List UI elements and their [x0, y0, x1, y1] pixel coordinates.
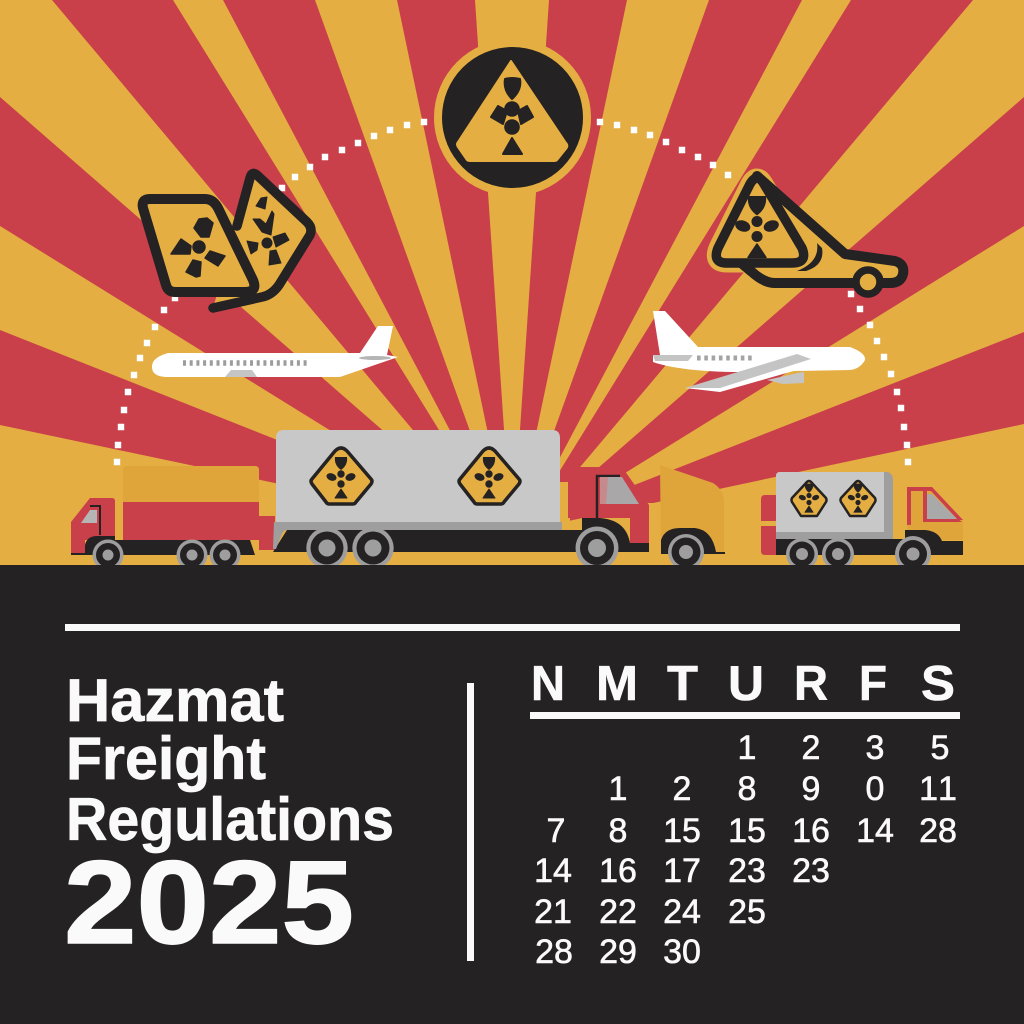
trailer inner mark: [797, 243, 822, 271]
dates: 1: [609, 770, 627, 808]
title: [64, 667, 394, 969]
chassis: [776, 530, 963, 555]
wheels: [306, 526, 618, 570]
dates: 8: [609, 812, 627, 850]
dates: 29: [599, 933, 637, 971]
title: Hazmat: [66, 667, 284, 734]
trailer wheel: [856, 270, 880, 294]
weekday header: R: [794, 657, 828, 711]
window: [90, 506, 100, 535]
yellow truck front: [660, 465, 725, 570]
icon: hazard placards: [143, 173, 311, 308]
triangle symbol: [734, 196, 780, 258]
rear red panels: [761, 495, 776, 521]
weekday header: S: [921, 657, 955, 711]
weekday header: N: [531, 657, 565, 711]
small right truck: [761, 472, 963, 572]
icon: hazard trailer: [716, 176, 903, 294]
dates: 21: [534, 893, 572, 931]
vertical divider: [467, 683, 474, 961]
wheels: [786, 536, 931, 572]
front placard symbol: [171, 218, 225, 277]
back placard symbol: [247, 197, 289, 265]
dates: 11: [919, 770, 957, 808]
dates: 14: [534, 852, 572, 890]
weekday header: T: [667, 657, 698, 711]
dates: 15: [663, 812, 701, 850]
dates: 0: [866, 770, 884, 808]
dates: 2: [673, 770, 691, 808]
left airplane: [152, 326, 398, 377]
title: 2025: [64, 837, 354, 969]
weekday header: U: [728, 657, 764, 711]
connector: [259, 516, 275, 550]
dark lower panel: [0, 565, 1024, 1024]
placard right: [840, 481, 876, 516]
dates: 28: [535, 933, 573, 971]
large hazmat truck: [273, 430, 649, 570]
calendar: [530, 657, 960, 971]
trailer base strip: [273, 522, 562, 549]
dotted route arc: [117, 122, 908, 462]
dates: 22: [599, 893, 637, 931]
dates: 8: [738, 770, 756, 808]
sunburst background: [0, 0, 1024, 570]
chassis: [71, 536, 255, 555]
triangle sign: [716, 178, 804, 263]
right airplane: [653, 311, 865, 392]
trailer halo: [716, 178, 804, 263]
back placard: [213, 173, 311, 308]
top rule: [65, 624, 960, 631]
placard left: [792, 481, 826, 516]
dates: 16: [599, 852, 637, 890]
placard right: [459, 448, 520, 504]
dates: 30: [663, 933, 701, 971]
dates: 25: [728, 893, 766, 931]
cargo box: [776, 472, 893, 532]
dates: 17: [663, 852, 701, 890]
front placard: [143, 199, 254, 292]
header rule: [530, 712, 960, 719]
dates: 15: [728, 812, 766, 850]
trailer arm: [740, 176, 903, 283]
cab: [568, 467, 649, 543]
cargo box: [123, 466, 259, 502]
dates: 3: [866, 729, 884, 767]
cab: [71, 498, 115, 553]
dates: 14: [856, 812, 894, 850]
dates: 16: [792, 812, 830, 850]
weekday header: M: [596, 657, 638, 711]
cab: [907, 487, 963, 540]
title: Freight: [66, 725, 266, 792]
dates: 23: [728, 852, 766, 890]
dates: 9: [802, 770, 820, 808]
dates: 2: [802, 729, 820, 767]
title: Regulations: [66, 786, 394, 853]
dates: 24: [663, 893, 701, 931]
dates: 23: [792, 852, 830, 890]
dates: 1: [738, 729, 756, 767]
placard left: [311, 448, 372, 504]
small left truck: [71, 466, 275, 570]
dates: 28: [919, 812, 957, 850]
trailer box: [276, 430, 560, 522]
central radiation symbol: [491, 78, 533, 154]
dates: [534, 729, 957, 971]
weekday header: [531, 657, 955, 711]
dates: 5: [931, 729, 949, 767]
wheels: [92, 540, 240, 570]
chassis: [273, 518, 649, 552]
icon: central hazard symbol in circle: [434, 39, 591, 196]
dates: 7: [547, 812, 565, 850]
weekday header: F: [859, 657, 887, 711]
